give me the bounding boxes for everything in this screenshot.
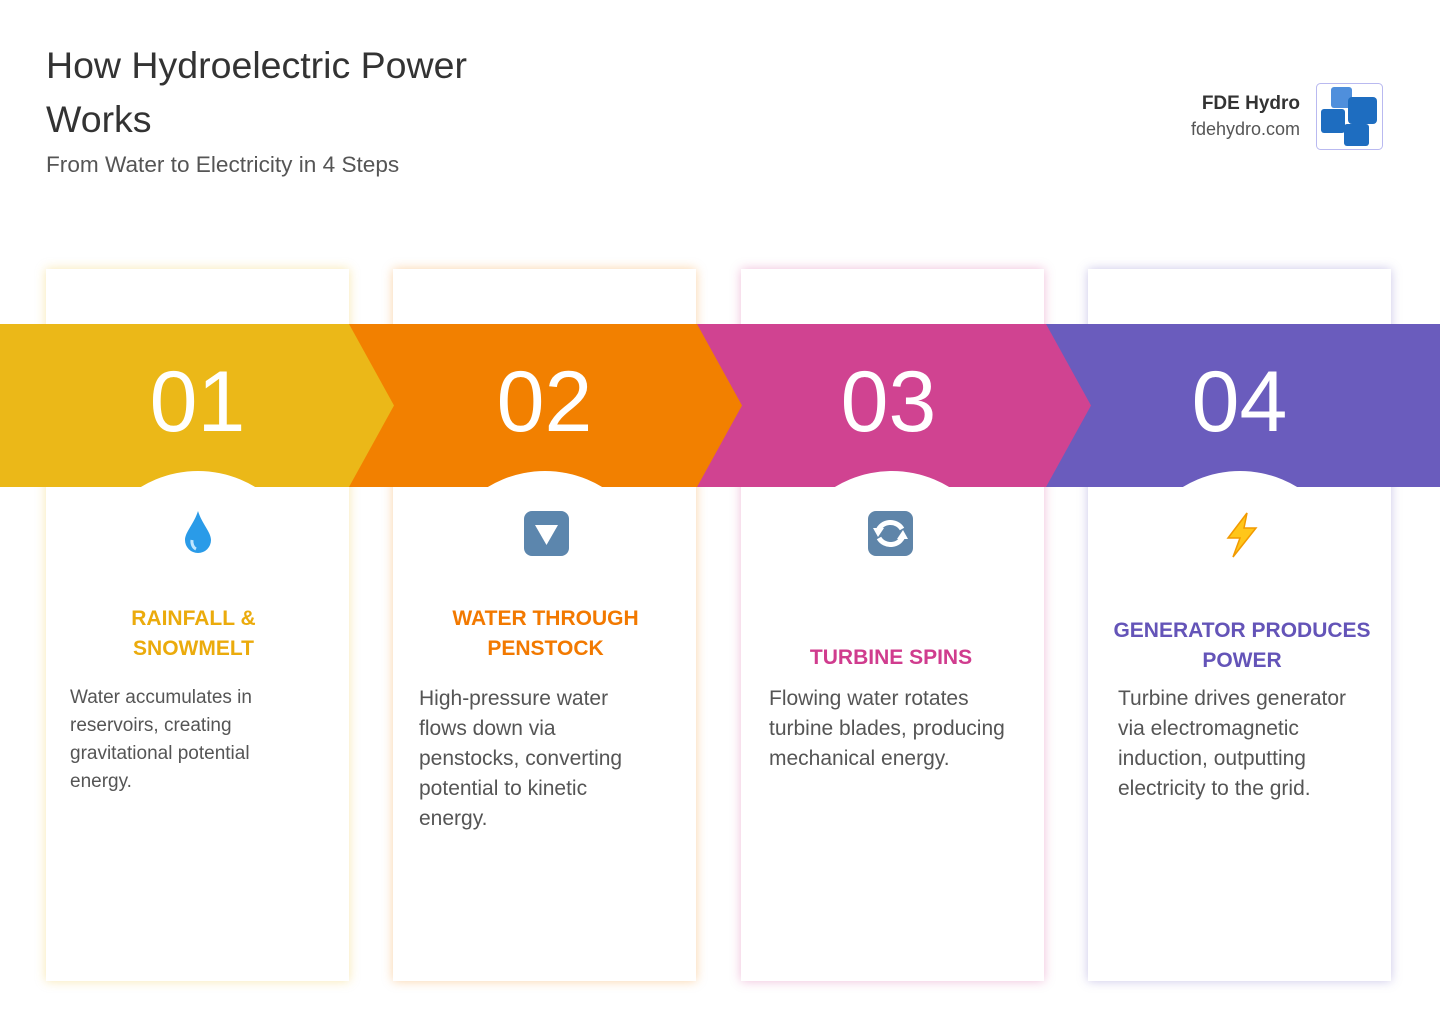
- heading 2: [452, 607, 639, 660]
- icon: refresh: [868, 511, 913, 556]
- card 4: [1088, 269, 1391, 981]
- body 1: Water accumulates in reservoirs, creating gravitational potential energy.: [70, 687, 252, 792]
- icon: logo: [1316, 83, 1383, 150]
- heading 1: SNOWMELT: [133, 637, 254, 660]
- heading 2: PENSTOCK: [487, 637, 604, 660]
- icon: down button: [524, 511, 569, 556]
- chevron band: [0, 324, 1440, 487]
- brand url: fdehydro.com: [1191, 119, 1300, 139]
- number 04: 04: [1192, 354, 1287, 450]
- card 1: [46, 269, 349, 981]
- card 3: [741, 269, 1044, 981]
- icon: lightning: [1226, 512, 1258, 558]
- number 02: 02: [497, 354, 592, 450]
- heading 2: WATER THROUGH: [452, 607, 639, 630]
- number 03: 03: [841, 354, 936, 450]
- heading 4: POWER: [1202, 649, 1282, 672]
- heading 3: TURBINE SPINS: [810, 646, 972, 669]
- heading 4: GENERATOR PRODUCES: [1113, 619, 1371, 642]
- logo block: [1191, 83, 1383, 150]
- heading 4: [1113, 619, 1371, 672]
- card 2: [393, 269, 696, 981]
- heading 1: [131, 607, 256, 660]
- brand name: FDE Hydro: [1202, 93, 1300, 114]
- title: How Hydroelectric Power Works: [46, 44, 467, 140]
- body 3: Flowing water rotates turbine blades, producing mechanical energy.: [769, 687, 1005, 770]
- subtitle: From Water to Electricity in 4 Steps: [46, 152, 399, 177]
- body 4: Turbine drives generator via electromagnetic induction, outputting electricity to the grid.: [1118, 687, 1346, 800]
- heading 1: RAINFALL &: [131, 607, 256, 630]
- icon: water drop: [185, 511, 211, 553]
- number 01: 01: [150, 354, 245, 450]
- body 2: High-pressure water flows down via penstocks, converting potential to kinetic energy.: [419, 687, 622, 830]
